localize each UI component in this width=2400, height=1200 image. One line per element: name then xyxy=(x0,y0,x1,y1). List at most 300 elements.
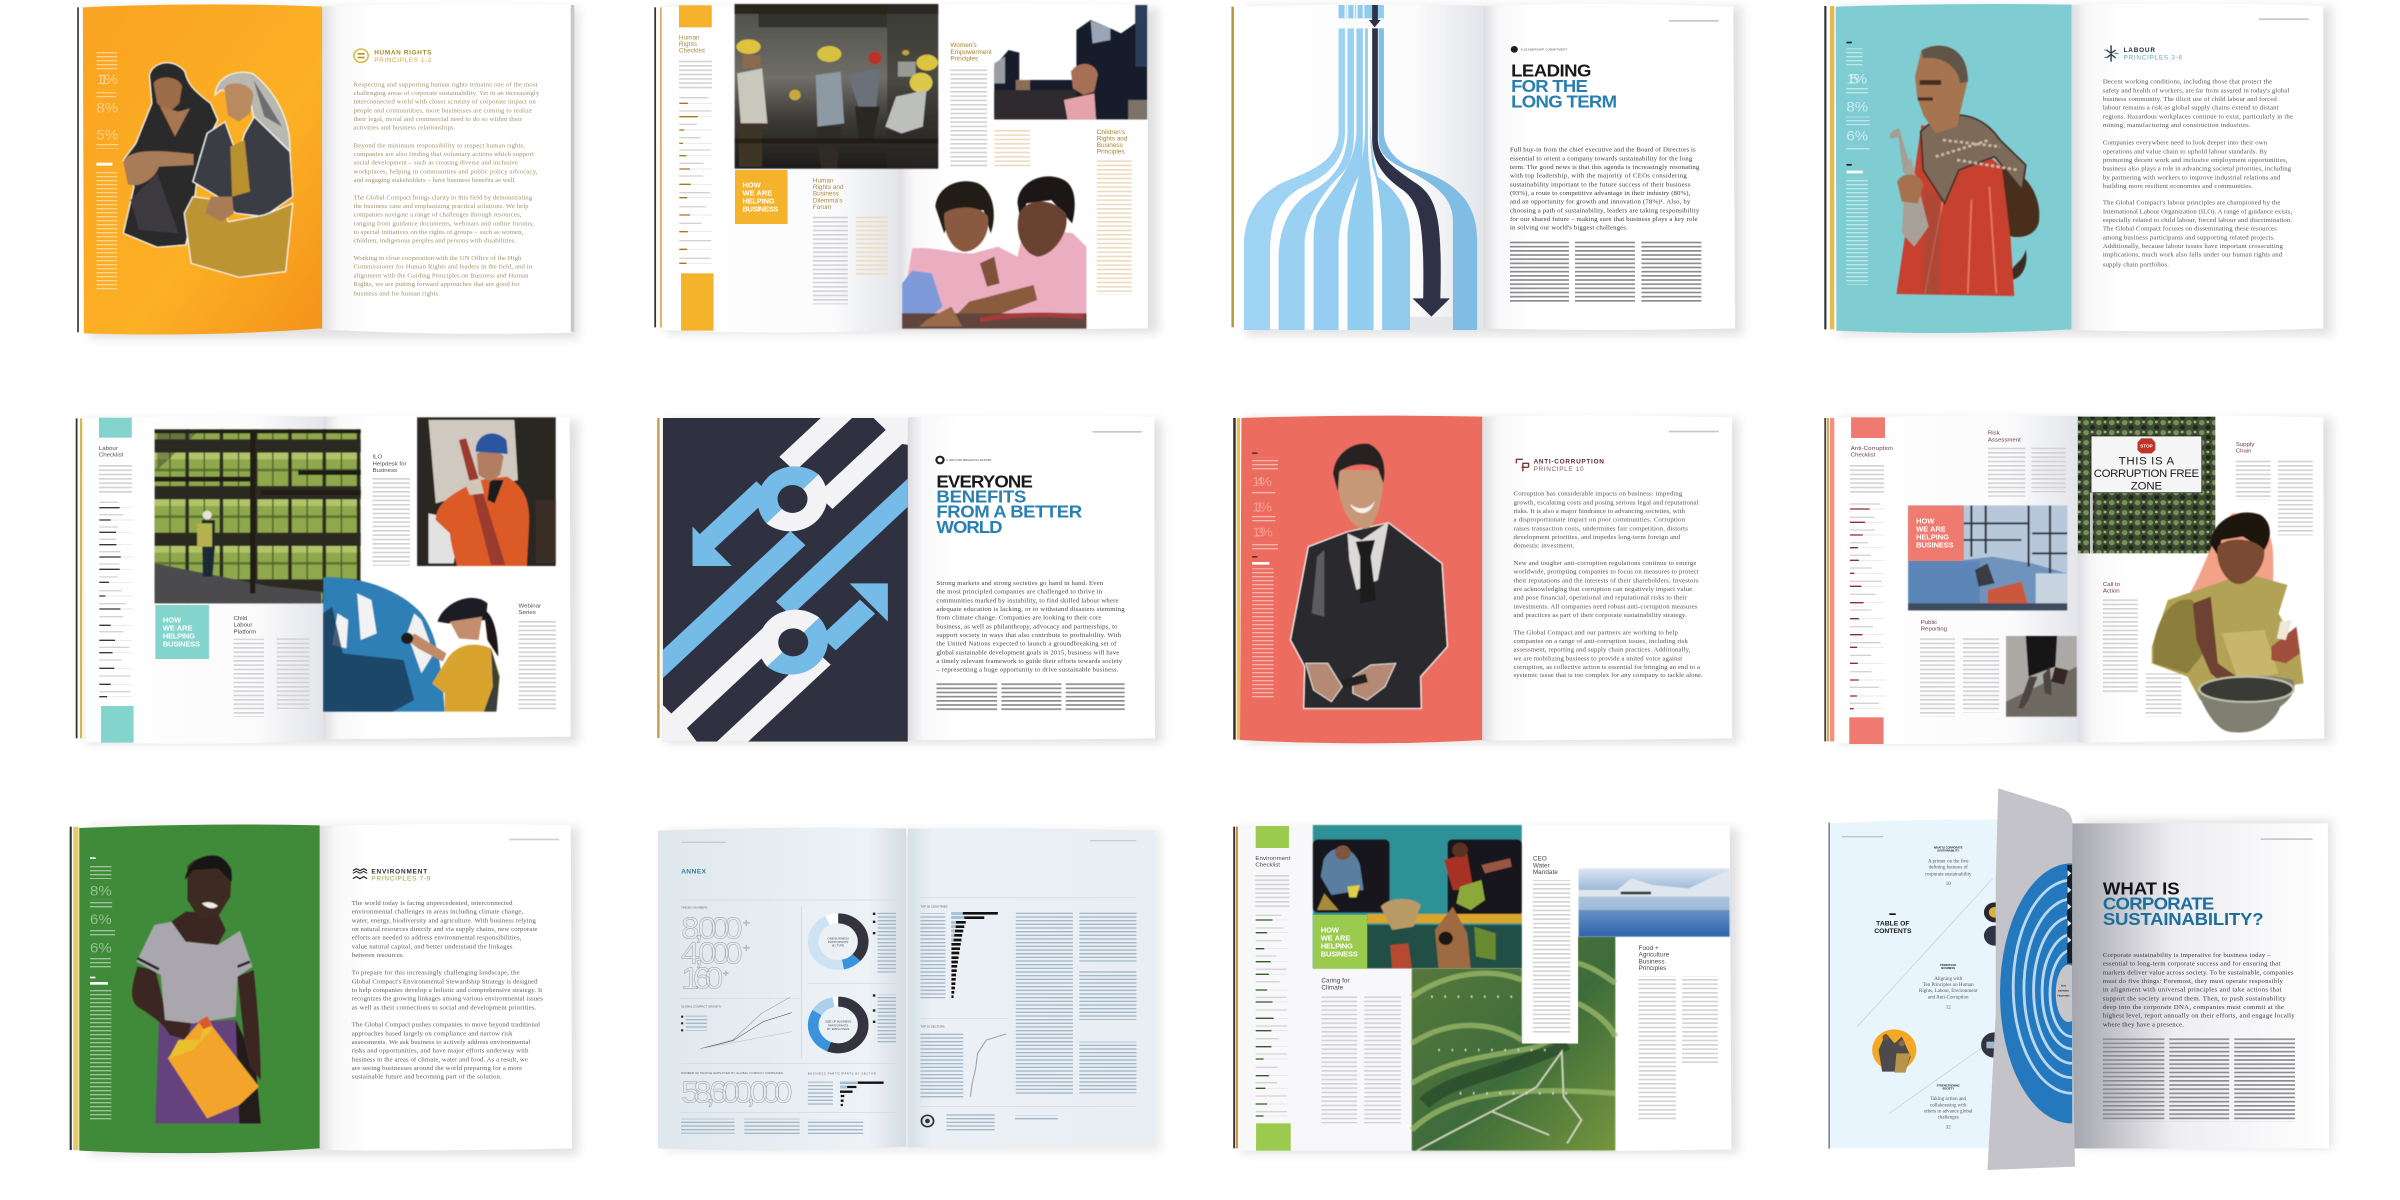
photo: man in a suit xyxy=(1290,444,1447,709)
body text: labour remains a risk as global supply chains extend to distant xyxy=(2103,105,2279,112)
right page xyxy=(899,3,1148,329)
how we are helping business box: HOW xyxy=(1916,517,1935,526)
table of contents text: Rights, Labour, Environment xyxy=(1919,989,1978,994)
headline xyxy=(1511,61,1617,111)
spread: everyone benefits xyxy=(644,411,1162,751)
photo: corruption free zone sign xyxy=(2078,417,2215,553)
checklist: Rights xyxy=(679,41,697,48)
sidebar statistics: 6% xyxy=(90,912,112,928)
body text: New and tougher anti-corruption regulations continue to emerge xyxy=(1514,560,1697,567)
bar chart: sectors xyxy=(808,1082,884,1106)
photo: women at a train window xyxy=(1313,825,1522,968)
body text: The world today is facing unprecedented, interconnected xyxy=(352,900,513,907)
left page xyxy=(1835,415,2078,744)
food and agriculture article xyxy=(1639,945,1718,1121)
photo: construction workers xyxy=(735,4,938,169)
child labour platform article: Labour xyxy=(234,623,252,629)
body text: Companies everywhere need to look deeper into their own xyxy=(2103,140,2268,147)
body text: sustainable future and becoming part of the solution. xyxy=(352,1074,502,1081)
ilo helpdesk article: Helpdesk for xyxy=(372,461,407,467)
donut chart: businesses by employee size: SIZE OF BUSINESS xyxy=(825,1020,851,1024)
women's empowerment article: Principles xyxy=(950,56,978,62)
body text: assessment, reporting and supply chain practices. Additionally, xyxy=(1514,647,1691,654)
heading with logo xyxy=(353,839,559,883)
bar chart: top countries xyxy=(920,904,998,998)
right page xyxy=(908,828,1154,1148)
supply chain article xyxy=(2236,442,2313,535)
how we are helping business box: HELPING xyxy=(1321,942,1353,950)
body text: investments. All companies need robust anti-corruption measures xyxy=(1514,604,1698,610)
checklist: Human xyxy=(679,35,700,41)
photo: corruption free zone sign: ZONE xyxy=(2131,481,2162,492)
how we are helping business box: HELPING xyxy=(163,632,195,641)
body text: choosing a path of sustainability, leaders are taking responsibility xyxy=(1510,208,1700,214)
body text: activities and business relationships. xyxy=(354,125,456,132)
body text: – representing a huge opportunity to drive sustainable business. xyxy=(935,667,1119,674)
body text: environmental challenges in areas including climate change, xyxy=(352,909,524,916)
table of contents text: A primer on the five xyxy=(1928,859,1968,864)
body text: Beyond the minimum responsibility to respect human rights, xyxy=(354,143,525,149)
body text: to help companies develop a holistic and comprehensive strategy. It xyxy=(352,987,542,994)
body text: for our shared future – making sure that business plays a key role xyxy=(1510,216,1698,223)
big numbers: 4,000 xyxy=(681,935,742,970)
heading with logo: PRINCIPLE 10 xyxy=(1534,466,1584,473)
right page xyxy=(323,415,571,739)
body text: Respecting and supporting human rights remains one of the most xyxy=(354,82,538,88)
right page xyxy=(1482,415,1732,741)
sidebar statistics: 15% xyxy=(1846,72,1867,87)
sidebar statistics: 13% xyxy=(1252,524,1273,540)
how we are helping business box: WE ARE xyxy=(163,624,193,633)
checklist xyxy=(1255,856,1291,1116)
right page xyxy=(1483,4,1735,330)
body text: the most principled companies are challenged to thrive in xyxy=(936,589,1103,596)
body text: support society in ways that also contribute to profitability. With xyxy=(936,632,1122,639)
body text: global sustainable development goals in 2015, business will have xyxy=(936,650,1119,656)
how we are helping business box: HELPING xyxy=(742,197,775,206)
body text: with top leadership, with the majority of CEOs considering xyxy=(1510,173,1688,180)
line chart: top sectors xyxy=(920,1024,1006,1098)
body text: recognizes the growing linkages among various environmental issues xyxy=(352,996,543,1003)
headline: EVERYONE xyxy=(936,472,1033,491)
headline: WHAT IS xyxy=(2103,879,2180,898)
headline: SUSTAINABILITY? xyxy=(2103,910,2264,929)
big numbers: 160 xyxy=(681,960,723,995)
fold-out flap xyxy=(1987,788,2075,1170)
big numbers: + xyxy=(723,969,729,980)
body text xyxy=(935,580,1125,674)
how we are helping business box: HOW xyxy=(163,616,181,625)
children's rights article: Rights and xyxy=(1097,136,1128,143)
body text: social development – such as creating diverse and inclusive xyxy=(354,160,518,167)
donut chart: businesses by employee size: BY EMPLOYEES xyxy=(827,1027,849,1031)
big numbers: + xyxy=(743,942,750,955)
right page xyxy=(1522,825,1731,1151)
section tag xyxy=(936,431,1142,463)
body text: especially related to child labour, forced labour and discrimination. xyxy=(2103,217,2293,224)
photo: corruption free zone sign: CORRUPTION FREE xyxy=(2094,468,2199,480)
body text: implications, much work also falls under our human rights and xyxy=(2103,252,2283,259)
right page xyxy=(2071,4,2323,331)
caring for climate article: Caring for xyxy=(1321,978,1350,985)
table of contents text: and Anti-Corruption xyxy=(1928,995,1969,1000)
photo: corruption free zone sign: STOP xyxy=(2140,444,2153,449)
checklist xyxy=(1850,446,1893,709)
body text: in solving our world's biggest challenges. xyxy=(1510,225,1628,232)
illustration: funnel of blue stripes xyxy=(1244,5,1477,330)
body text: Full buy-in from the chief executive and the Board of Directors is xyxy=(1510,147,1696,154)
body text: International Labour Organization (ILO). A range of guidance exists, xyxy=(2103,209,2293,215)
body text: are seeing businesses around the world preparing for a more xyxy=(352,1065,522,1072)
body text: Global Compact's Environmental Stewardship Strategy is designed xyxy=(352,979,538,985)
sidebar statistics: 14% xyxy=(1252,473,1272,489)
checklist xyxy=(679,35,712,263)
left page green xyxy=(79,824,320,1153)
public reporting article: Public xyxy=(1921,620,1937,626)
how we are helping business box: BUSINESS xyxy=(163,640,200,649)
line chart: global compact growth: GLOBAL COMPACT GROWTH xyxy=(681,1004,721,1008)
body text: companies are also finding that voluntary actions which support xyxy=(354,151,534,158)
photo: two children xyxy=(902,176,1086,329)
body text: a timely relevant framework to guide their efforts towards society xyxy=(936,658,1123,665)
checklist: Checklist xyxy=(679,48,705,55)
table of contents text: CONTENTS xyxy=(1874,928,1912,935)
photo: arctic sea xyxy=(1579,868,1730,937)
big numbers xyxy=(680,900,896,1113)
section tag: A LEADERSHIP COMMITMENT xyxy=(1521,47,1567,51)
how we are helping business box: WE ARE xyxy=(1321,934,1351,942)
body text: between resources. xyxy=(352,952,405,959)
headline: WORLD xyxy=(936,518,1003,537)
text columns xyxy=(2103,1038,2295,1122)
bar chart: top countries: TOP 20 COUNTRIES xyxy=(920,904,948,908)
icon: circular photo of two women xyxy=(1872,1029,1916,1073)
food and agriculture article: Agriculture xyxy=(1639,952,1670,959)
food and agriculture article: Food + xyxy=(1639,945,1659,952)
right page xyxy=(322,4,572,334)
body text: must do five things: Foremost, they must operate responsibly xyxy=(2103,978,2284,985)
body text: The Global Compact and our partners are working to help xyxy=(1514,630,1679,636)
sidebar statistics: 8% xyxy=(1846,100,1868,115)
body text: The Global Compact pushes companies to move beyond traditional xyxy=(352,1022,540,1029)
children's rights article xyxy=(1097,129,1132,295)
heading with logo: PRINCIPLES 1-2 xyxy=(374,57,432,64)
sidebar statistics: 11% xyxy=(1252,499,1272,515)
body text: their legal, moral and commercial need to do so within their xyxy=(354,116,523,123)
spread: environment principles xyxy=(70,824,579,1155)
heading with logo: ENVIRONMENT xyxy=(371,869,427,875)
body text: (93%), a route to competitive advantage in their industry (80%), xyxy=(1510,190,1691,197)
checklist: Checklist xyxy=(1255,863,1280,869)
photo: car and mechanic xyxy=(323,577,500,712)
body text: To prepare for this increasingly challenging landscape, the xyxy=(352,970,520,977)
body text: regions. Hazardous workplaces continue to exist, particularly in the xyxy=(2103,114,2293,120)
body text: a disproportionate impact on poor communities. Corruption xyxy=(1514,517,1686,524)
table of contents text: TABLE OF xyxy=(1876,921,1910,928)
body text: on natural resources directly and via supply chains, new corporate xyxy=(352,926,538,933)
body text xyxy=(354,82,540,297)
spread: human rights principles xyxy=(77,4,579,338)
headline: CORPORATE xyxy=(2103,894,2214,914)
heading with logo: PRINCIPLES 3-6 xyxy=(2124,55,2183,61)
photo: girl with a metal bowl xyxy=(2152,513,2304,732)
body text xyxy=(352,900,543,1081)
body text: worldwide, prompting companies to focus on measures to protect xyxy=(1514,569,1699,576)
body text: communities marked by instability, to find skilled labour where xyxy=(936,598,1119,604)
body text: and an opportunity for growth and innovation (78%)¹. Also, by xyxy=(1510,199,1691,206)
food and agriculture article: Principles xyxy=(1639,965,1666,972)
risk assessment article: Assessment xyxy=(1988,437,2021,443)
body text: safety and health of workers, are far from assured in today's global xyxy=(2103,88,2289,94)
spread: annex xyxy=(658,828,1161,1152)
sidebar statistics xyxy=(90,857,115,1122)
section tag: A GROUND-BREAKING EFFORT xyxy=(946,458,992,462)
body text: risks. It is also a major hindrance to advancing societies, with xyxy=(1514,508,1686,515)
body text: efforts are needed to address environmental responsibilities, xyxy=(352,935,522,942)
webinar series article: Webinar xyxy=(519,603,541,609)
body text xyxy=(1514,491,1703,679)
body text: business community. The illicit use of child labour and forced xyxy=(2103,96,2278,103)
how we are helping business box: BUSINESS xyxy=(1321,950,1358,958)
body text: highest level, report annually on their efforts, and engage locally xyxy=(2103,1013,2295,1020)
donut chart: businesses by region: PARTICIPANTS xyxy=(828,940,848,944)
body text: term. The good news is that this agenda is increasingly resonating xyxy=(1510,164,1700,171)
ilo helpdesk article xyxy=(372,455,410,566)
body text: to special initiatives on the rights of groups – such as women, xyxy=(354,229,524,236)
illustration: blue concentric arcs: DEFINING xyxy=(2058,991,2069,993)
checklist: Labour xyxy=(99,446,118,452)
body text: water, energy, biodiversity and agriculture. With business relying xyxy=(352,918,536,924)
body text: mining, manufacturing and construction industries. xyxy=(2103,122,2251,129)
text columns xyxy=(1510,241,1701,304)
table of contents text: corporate sustainability xyxy=(1925,872,1972,877)
ilo helpdesk article: Business xyxy=(372,468,397,474)
body text: as well as their connections to social and development priorities. xyxy=(352,1005,537,1011)
spread: what is corporate sustainability xyxy=(1829,788,2332,1170)
call to action article: Call to xyxy=(2103,582,2121,588)
body text xyxy=(1510,147,1700,232)
body text: Additionally, because labour issues have important crosscutting xyxy=(2103,243,2284,250)
photo: corruption free zone sign: THIS IS A xyxy=(2119,456,2175,468)
big numbers: THE BIG NUMBERS xyxy=(681,906,708,910)
risk assessment article: Risk xyxy=(1988,431,2000,437)
body text: Strong markets and strong societies go hand in hand. Even xyxy=(936,580,1104,587)
body text: we are mobilizing business to provide a united voice against xyxy=(1514,656,1682,662)
footer notes xyxy=(681,1119,863,1136)
icons: contents badges xyxy=(1981,902,2008,1058)
body text: and practices as part of their corporate sustainability strategy. xyxy=(1514,612,1687,619)
supply chain article: Chain xyxy=(2236,449,2252,455)
body text: The Global Compact's labour principles are championed by the xyxy=(2103,200,2280,207)
how we are helping business box: HOW xyxy=(1321,926,1339,934)
line chart: top sectors: TOP 10 SECTORS xyxy=(920,1024,945,1028)
dilemmas forum article: Business xyxy=(813,191,839,198)
big numbers: 8,000 xyxy=(681,910,742,945)
table of contents text: WHAT IS CORPORATE xyxy=(1934,846,1963,850)
body text: business and for human rights. xyxy=(354,291,440,297)
yellow tabs xyxy=(679,5,714,331)
sidebar statistics: 11% xyxy=(96,72,118,88)
sidebar statistics: 6% xyxy=(1846,129,1868,145)
how we are helping business box: HELPING xyxy=(1916,533,1949,542)
women's empowerment article: Empowerment xyxy=(950,49,992,56)
spread: labour principles xyxy=(1824,4,2332,335)
heading with logo xyxy=(2104,18,2309,62)
dilemmas forum article: Human xyxy=(813,178,834,184)
donut chart: businesses by employee size xyxy=(813,994,896,1048)
body text: business also plays a role in advancing societal priorities, including xyxy=(2103,166,2292,173)
dark arrow xyxy=(1369,5,1450,317)
body text: The Global Compact focuses on disseminating these resources xyxy=(2103,226,2277,233)
sidebar statistics: 6% xyxy=(90,941,112,957)
right page xyxy=(908,415,1155,740)
women's empowerment article xyxy=(950,42,1030,168)
body text: from climate change. Companies are looking to their core xyxy=(936,615,1102,622)
left page xyxy=(1239,824,1522,1151)
food and agriculture article: Business xyxy=(1639,959,1665,965)
checklist: Checklist xyxy=(1851,453,1876,459)
women's empowerment article: Women's xyxy=(950,42,977,49)
big numbers: BUSINESS PARTICIPANTS BY SECTOR xyxy=(808,1071,876,1075)
spread: human rights how we help xyxy=(654,3,1159,333)
photo: worker in orange overalls xyxy=(417,417,556,566)
headline: FOR THE xyxy=(1511,77,1588,96)
photo: city crowd xyxy=(994,5,1147,119)
panel: ceo water mandate: Water xyxy=(1533,863,1550,869)
table of contents text: collaborating with xyxy=(1930,1103,1967,1108)
body text: value natural capital, and better understand the linkages xyxy=(352,944,513,950)
left page xyxy=(661,4,899,332)
body text: among business participants and supporting related projects. xyxy=(2103,235,2275,241)
dilemmas forum article: Forum xyxy=(813,204,831,211)
body text: business, as well as philanthropy, advocacy and partnerships, to xyxy=(936,624,1118,630)
spread: leading for the long term xyxy=(1231,4,1742,335)
emblem and credits xyxy=(921,1114,1058,1131)
panel: ceo water mandate: CEO xyxy=(1533,856,1547,863)
body text: operations and value chain to uphold labour standards. By xyxy=(2103,149,2268,155)
table of contents text: challenges xyxy=(1938,1116,1959,1121)
body text: Rights, we are putting forward approaches that are good for xyxy=(354,281,520,288)
child labour platform article: Platform xyxy=(234,629,256,635)
coral tabs xyxy=(1849,417,1885,744)
illustration: blue concentric arcs: FEATURES xyxy=(2057,995,2070,998)
how we are helping business box: BUSINESS xyxy=(1916,541,1954,550)
sidebar statistics: 8% xyxy=(90,884,112,899)
supply chain article: Supply xyxy=(2236,442,2254,448)
photo: smiling girl with water can xyxy=(132,856,261,1123)
heading with logo xyxy=(354,49,432,64)
how we are helping business box: BUSINESS xyxy=(742,205,778,214)
headline xyxy=(2103,879,2264,929)
donut chart: businesses by region: ONE BUSINESS xyxy=(828,936,849,940)
risk assessment article xyxy=(1988,431,2066,497)
child labour platform article xyxy=(234,616,310,717)
dilemmas forum article xyxy=(813,178,888,304)
table of contents text: defining features of xyxy=(1929,866,1968,871)
body text: business in the areas of climate, water and food. As a result, we xyxy=(352,1057,528,1063)
body text: building more resilient economies and communities. xyxy=(2103,183,2253,190)
photo: green hills with wind turbines xyxy=(1412,937,1615,1151)
big numbers: NUMBER OF PEOPLE EMPLOYED BY GLOBAL COMPACT COMPANIES xyxy=(681,1071,783,1075)
photo: warehouse forklift with help box xyxy=(1908,506,2067,610)
sidebar statistics: 8% xyxy=(96,101,118,117)
children's rights article: Business xyxy=(1097,142,1123,149)
body text: interconnected world with closer scrutiny of corporate impact on xyxy=(354,99,536,106)
illustration: blue concentric arcs: FIVE xyxy=(2061,986,2067,988)
body text: Working in close cooperation with the UN Office of the High xyxy=(354,255,522,262)
body text: growth, escalating costs and posing serious legal and reputational xyxy=(1514,500,1699,506)
body text: in alignment with universal principles and take actions that xyxy=(2103,987,2282,994)
table of contents text: 32 xyxy=(1946,1126,1951,1131)
how we are helping business box: HOW xyxy=(742,181,761,190)
line chart: global compact growth xyxy=(681,997,792,1049)
body text: and engaging stakeholders – have business benefits as well. xyxy=(354,177,516,184)
body text: companies navigate a range of challenges through resources, xyxy=(354,212,522,219)
how we are helping business box xyxy=(1908,506,1964,561)
checklist: Checklist xyxy=(99,453,124,459)
left page xyxy=(1829,819,2000,1148)
checklist xyxy=(99,446,132,697)
ilo helpdesk article: ILO xyxy=(372,455,383,461)
headline: LEADING xyxy=(1511,61,1591,81)
section tag xyxy=(1511,20,1719,53)
body text: deep into the corporate DNA, companies must commit at the xyxy=(2103,1004,2284,1011)
right page xyxy=(2071,823,2329,1148)
donut chart: businesses by region: BY TYPE xyxy=(832,944,844,948)
text columns xyxy=(936,682,1125,712)
sidebar statistics xyxy=(1252,452,1278,698)
checklist: Environment xyxy=(1255,856,1291,862)
how we are helping business box xyxy=(735,170,787,224)
body text xyxy=(2103,952,2295,1028)
spread: labour how we help xyxy=(76,415,579,744)
table of contents text: STRENGTHENING xyxy=(1937,1084,1960,1088)
webinar series article: Series xyxy=(519,610,536,616)
children's rights article: Children's xyxy=(1097,129,1125,136)
body text: their reputations and the interests of their shareholders. Investors xyxy=(1514,578,1699,584)
body text: development priorities, and impedes long-term foreign and xyxy=(1514,534,1681,541)
table of contents text: SOCIETY xyxy=(1942,1087,1954,1091)
big numbers: 58,600,000 xyxy=(681,1075,792,1109)
public reporting article xyxy=(1920,620,1999,717)
dense text columns xyxy=(1016,912,1136,1094)
table of contents text: 12 xyxy=(1946,1006,1951,1011)
body text: alignment with the Guiding Principles on Business and Human xyxy=(354,273,529,279)
body text: Commissioner for Human Rights and leaders in the field, and in xyxy=(354,264,533,271)
body text: raises transaction costs, undermines fair competition, distorts xyxy=(1514,526,1688,532)
spread: environment how we help xyxy=(1233,824,1739,1153)
sidebar statistics xyxy=(1846,42,1870,285)
body text: support the society around them. Then, to push sustainability xyxy=(2103,996,2286,1002)
left page xyxy=(658,828,906,1150)
contents diagonals xyxy=(1857,878,1993,1113)
photo: walking legs with briefcase xyxy=(2006,636,2077,717)
table of contents text xyxy=(1842,836,1978,1131)
body text: where they have a presence. xyxy=(2103,1022,2184,1028)
body text: Corporate sustainability is imperative for business today – xyxy=(2103,952,2271,959)
spread: anti-corruption principle xyxy=(1233,415,1739,743)
donut chart: businesses by region xyxy=(813,913,896,973)
body text xyxy=(2103,79,2293,269)
body text: by partnering with workers to improve industrial relations and xyxy=(2103,175,2281,181)
headline: FROM A BETTER xyxy=(936,502,1082,522)
illustration: blue concentric arcs xyxy=(2000,863,2072,1124)
left page xyxy=(84,416,323,744)
dilemmas forum article: Dilemma's xyxy=(813,198,843,204)
caring for climate article: Climate xyxy=(1321,985,1344,991)
body text: markets deliver value across society. To be sustainable, companies xyxy=(2103,970,2294,976)
how we are helping business box xyxy=(155,605,209,659)
